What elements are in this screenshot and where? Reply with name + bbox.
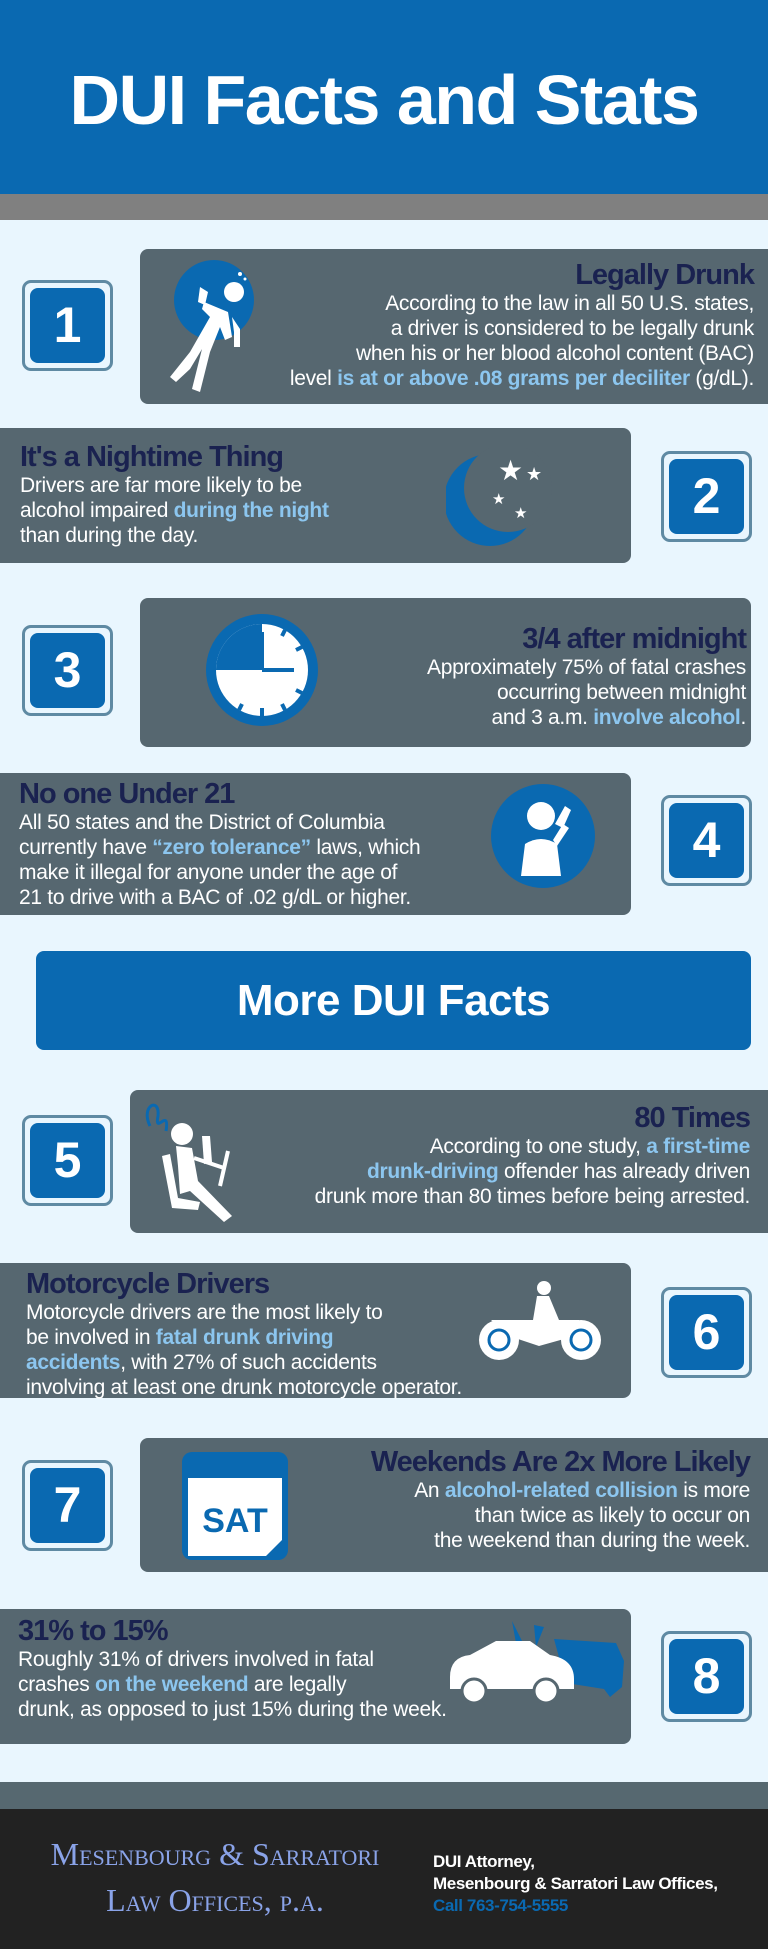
text: weekends [371,1446,751,1552]
logo text: Law Offices, p.a. [106,1882,324,1918]
text: 80 times [315,1102,750,1208]
icon: person drinking [491,784,595,888]
panel 3 [140,598,751,747]
text: 31% to 15%: drunk, as opposed to just 15% during the week. [18,1698,447,1721]
text: 3/4 after midnight: Approximately 75% of fatal crashes [427,656,746,679]
panel 1 [140,249,768,404]
number 1: 1 [54,297,81,353]
text: motorcycle: accidents, with 27% of such accidents [26,1351,377,1374]
text: under 21: No one Under 21 [19,778,234,810]
text: under 21 [19,778,420,909]
text: legally drunk: Legally Drunk [575,259,754,291]
title: DUI Facts and Stats [70,61,698,139]
icon: moon and stars: ★ [492,491,505,508]
text: motorcycle: involving at least one drunk motorcycle operator. [26,1376,462,1399]
logo text [51,1836,379,1918]
number 2: 2 [693,468,720,524]
text: under 21: currently have “zero tolerance” laws, which [19,836,420,859]
text: motorcycle: Motorcycle drivers are the most likely to [26,1301,382,1324]
text: 80 times: According to one study, a first-time [430,1135,750,1158]
text: 80 times: 80 Times [634,1102,750,1134]
contact text [433,1852,718,1915]
panel 7 [140,1438,768,1572]
icon: clock [206,614,318,726]
number 4 [661,795,752,886]
icon: motorcycle [479,1281,601,1360]
text: under 21: make it illegal for anyone under the age of [19,861,397,884]
text: nightime: than during the day. [20,524,198,547]
text: 3/4 after midnight: 3/4 after midnight [522,623,746,655]
number 8: 8 [693,1648,720,1704]
number 7: 7 [54,1477,81,1533]
text: 3/4 after midnight [427,623,747,729]
contact text: Call 763-754-5555 [433,1896,568,1915]
text: 31% to 15%: 31% to 15% [18,1615,168,1647]
text: 31% to 15%: crashes on the weekend are legally [18,1673,346,1696]
number 3 [22,625,113,716]
number 5 [22,1115,113,1206]
text: 31% to 15% [18,1615,447,1721]
text: weekends: Weekends Are 2x More Likely [371,1446,750,1478]
icon: calendar sat: SAT [202,1502,268,1540]
text: 3/4 after midnight: and 3 a.m. involve alcohol. [491,706,746,729]
text: under 21: All 50 states and the District of Columbia [19,811,385,834]
banner: more dui facts [36,951,751,1050]
text: nightime [20,441,329,547]
icon: drunk person [170,260,254,392]
text: 3/4 after midnight: occurring between midnight [497,681,746,704]
text: legally drunk: when his or her blood alcohol content (BAC) [356,342,754,365]
text: legally drunk: a driver is considered to be legally drunk [391,317,754,340]
icon: drunk driver [146,1104,232,1222]
contact text: Mesenbourg & Sarratori Law Offices, [433,1874,718,1893]
text: under 21: 21 to drive with a BAC of .02 g/dL or higher. [19,886,411,909]
number 2 [661,451,752,542]
panel 2 [0,428,631,563]
footer [0,1809,768,1949]
header [0,0,768,194]
number 5: 5 [54,1132,81,1188]
text: motorcycle: be involved in fatal drunk driving [26,1326,333,1349]
text: legally drunk: level is at or above .08 grams per deciliter (g/dL). [290,367,754,390]
banner: more dui facts: More DUI Facts [237,976,550,1025]
icon: moon and stars: ★ [526,464,542,484]
text: motorcycle: Motorcycle Drivers [26,1268,269,1300]
contact text: DUI Attorney, [433,1852,535,1871]
text: legally drunk [290,259,755,390]
text: nightime: alcohol impaired during the night [20,499,329,522]
number 8 [661,1631,752,1722]
number 3: 3 [54,642,81,698]
number 6 [661,1287,752,1378]
number 6: 6 [693,1304,720,1360]
text: nightime: It's a Nightime Thing [20,441,283,473]
text: weekends: the weekend than during the week. [434,1529,750,1552]
number 4: 4 [693,812,720,868]
icon: moon and stars: ★ [514,505,527,522]
number 1 [22,280,113,371]
panel 8 [0,1609,631,1744]
text: weekends: than twice as likely to occur on [475,1504,750,1527]
number 7 [22,1460,113,1551]
text: weekends: An alcohol-related collision is more [414,1479,750,1502]
text: legally drunk: According to the law in all 50 U.S. states, [385,292,754,315]
icon: moon and stars [446,455,542,546]
logo text: Mesenbourg & Sarratori [51,1836,379,1872]
panel 4 [0,773,631,915]
text: motorcycle [26,1268,462,1399]
text: 80 times: drunk more than 80 times before being arrested. [315,1185,750,1208]
panel 6 [0,1263,631,1398]
text: nightime: Drivers are far more likely to be [20,474,302,497]
icon: moon and stars: ★ [498,455,523,486]
icon: calendar sat [182,1452,288,1560]
text: 31% to 15%: Roughly 31% of drivers involved in fatal [18,1648,374,1671]
panel 5 [130,1090,768,1233]
icon: car crash [450,1621,624,1702]
text: 80 times: drunk-driving offender has already driven [367,1160,750,1183]
